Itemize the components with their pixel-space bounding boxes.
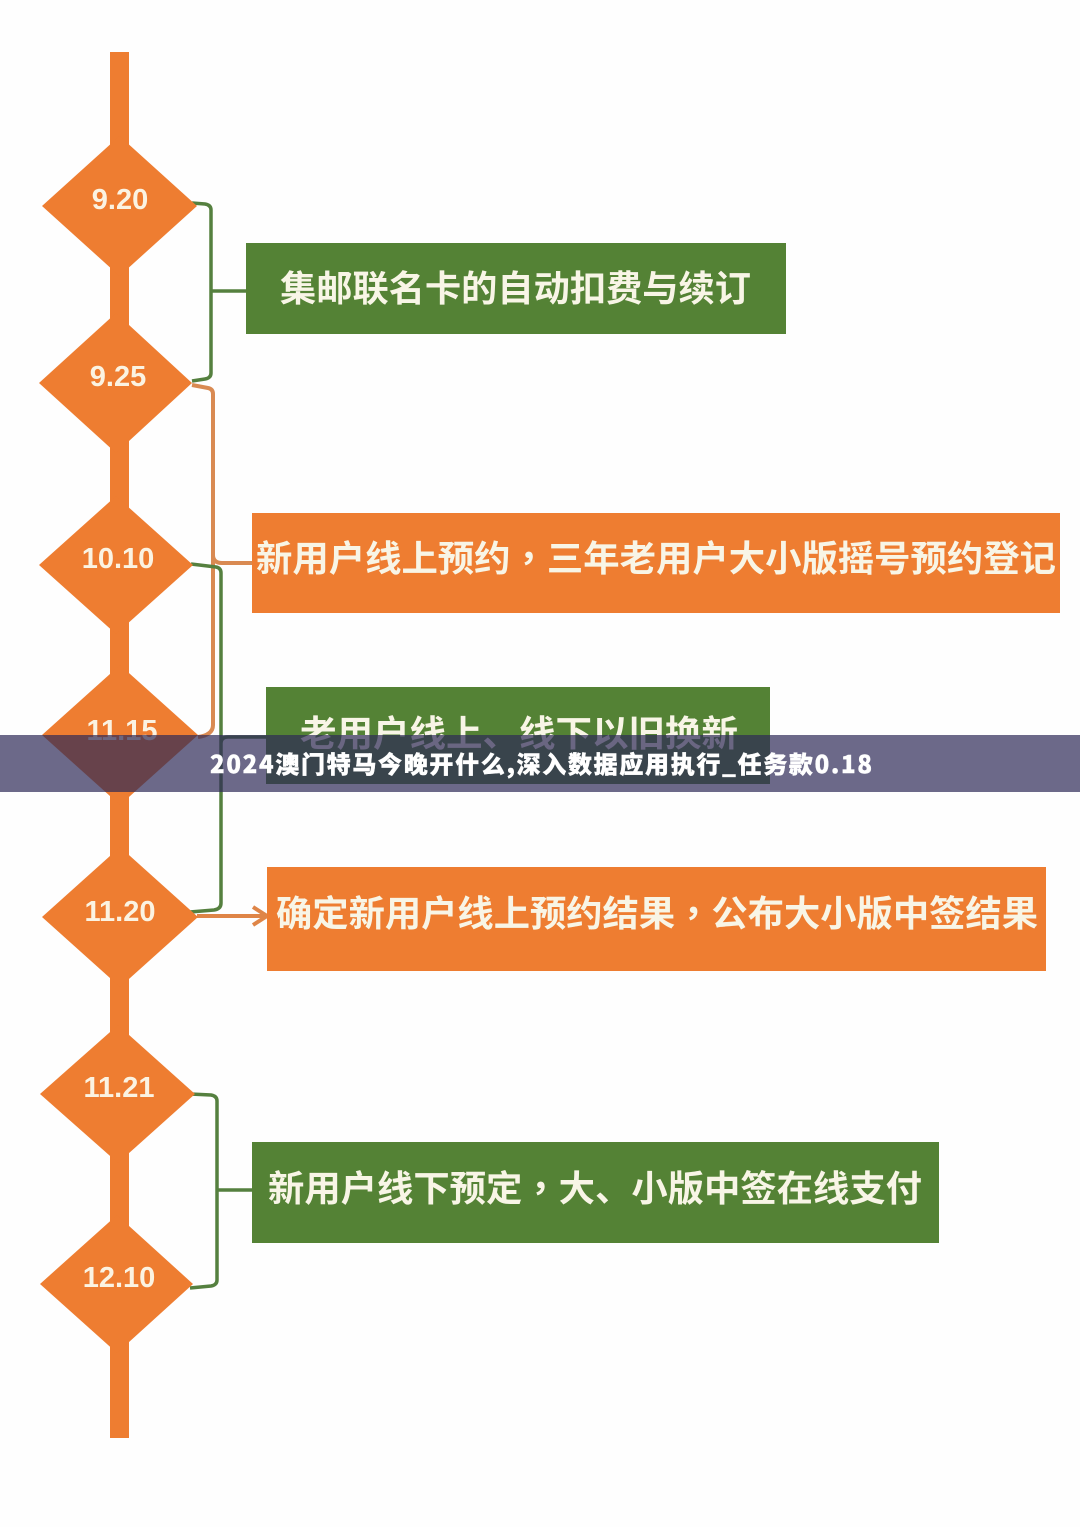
date node 9.25 [39,313,192,453]
orange arrow to result box [197,907,267,925]
date node 9.20 [42,136,197,276]
green bracket: 10.10 to 11.20 [190,564,266,912]
step box: online reservation [252,513,1060,613]
title band: 2024澳门特马今晚开什么,深入数据应用执行_任务款0.18 [210,745,872,780]
step box: online reservation: 新用户线上预约，三年老用户大小版摇号预约登记 [256,530,1056,582]
step box: trade-in: 老用户线上、线下以旧换新 [300,713,738,754]
title band [0,735,1080,792]
date node 11.21 [40,1025,195,1163]
step box: card auto-renewal [246,243,786,334]
green bracket: 9.20 to 9.25 [192,203,246,381]
timeline stem [110,52,129,1438]
step box: reservation results: 确定新用户线上预约结果，公布大小版中签结果 [276,885,1038,937]
date node 11.21: 11.21 [84,1072,154,1104]
step box: card auto-renewal: 集邮联名卡的自动扣费与续订 [280,268,751,309]
date node 9.20: 9.20 [92,184,148,216]
step box: trade-in [266,687,770,784]
date node 11.20: 11.20 [85,896,155,928]
step box: offline booking and payment [252,1142,939,1243]
date node 10.10 [39,496,193,634]
date node 12.10 [40,1215,193,1353]
date node 11.15: 11.15 [87,715,157,747]
step box: offline booking and payment: 新用户线下预定，大、小版中签在线支付 [268,1160,922,1212]
date node 9.25: 9.25 [90,361,146,393]
date node 11.20 [42,847,198,987]
date node 12.10: 12.10 [83,1262,155,1294]
green bracket: 11.21 to 12.10 [190,1094,253,1288]
date node 11.15 [42,665,198,805]
date node 10.10: 10.10 [82,543,154,575]
orange bracket: 9.25 to 11.15 [192,385,253,737]
step box: reservation results [267,867,1046,971]
